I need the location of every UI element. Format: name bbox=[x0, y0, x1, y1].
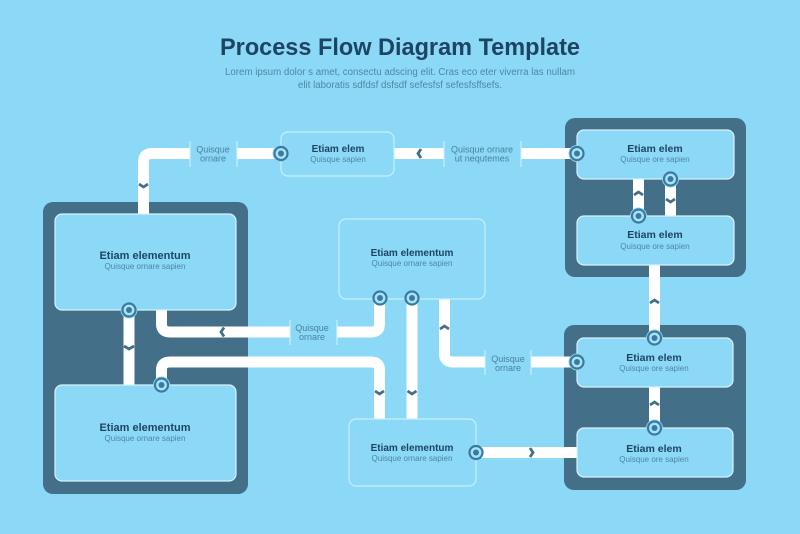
box: top right lower: Quisque ore sapien bbox=[620, 242, 690, 251]
box: center: Quisque ornare sapien bbox=[372, 259, 452, 268]
box: top right lower bbox=[577, 216, 734, 265]
label: quisque ornare top left bbox=[190, 141, 237, 167]
box: left bottom: Quisque ornare sapien bbox=[105, 434, 185, 443]
label: quisque ornare center right: Quisque bbox=[491, 354, 525, 364]
box: top center: Etiam elem bbox=[312, 144, 365, 155]
panel: top right group bbox=[565, 118, 746, 277]
box: bottom center: Etiam elementum bbox=[371, 443, 454, 454]
subtitle bbox=[225, 67, 575, 91]
subtitle: Lorem ipsum dolor s amet, consectu adscing elit. Cras eco eter viverra las nullam bbox=[225, 67, 575, 78]
box: left top: Quisque ornare sapien bbox=[105, 262, 185, 271]
box: center: Etiam elementum bbox=[371, 248, 454, 259]
box: bottom right lower bbox=[577, 428, 733, 477]
label: quisque ornare center left: Quisque bbox=[295, 323, 329, 333]
panel: left group bbox=[43, 202, 248, 494]
box: left top: Etiam elementum bbox=[99, 250, 191, 262]
label: quisque ornare center left bbox=[290, 320, 337, 345]
box: left bottom bbox=[55, 385, 236, 481]
label: quisque ornare center right bbox=[485, 350, 531, 375]
box: top right upper: Etiam elem bbox=[627, 143, 683, 155]
box: left top bbox=[55, 214, 236, 310]
box: top center bbox=[281, 132, 394, 176]
box: top right upper: Quisque ore sapien bbox=[620, 155, 690, 164]
label: quisque ornare center left: ornare bbox=[299, 332, 325, 342]
label: quisque ornare ut nequtemes bbox=[444, 141, 521, 167]
label: quisque ornare top left: ornare bbox=[200, 154, 226, 164]
panel: bottom right group bbox=[564, 325, 746, 490]
box: center bbox=[339, 219, 485, 299]
box: bottom right upper bbox=[577, 338, 733, 387]
box: bottom right upper: Etiam elem bbox=[626, 352, 682, 364]
connector nodes bbox=[120, 145, 679, 459]
box: bottom right lower: Etiam elem bbox=[626, 443, 682, 455]
connector pipes bbox=[129, 154, 670, 452]
box: left bottom: Etiam elementum bbox=[99, 422, 191, 434]
subtitle: elit laboratis sdfdsf dsfsdf sefesfsf sefesfsffsefs. bbox=[298, 80, 502, 91]
label: quisque ornare ut nequtemes: ut nequtemes bbox=[455, 154, 510, 164]
box: bottom center: Quisque ornare sapien bbox=[372, 454, 452, 463]
box: bottom center bbox=[349, 419, 476, 486]
box: bottom right lower: Quisque ore sapien bbox=[619, 455, 689, 464]
label: quisque ornare ut nequtemes: Quisque ornare bbox=[451, 144, 513, 154]
box: top right lower: Etiam elem bbox=[627, 229, 683, 241]
box: top right upper bbox=[577, 130, 734, 179]
title: Process Flow Diagram Template bbox=[220, 34, 580, 61]
flow direction chevrons bbox=[124, 149, 675, 457]
box: bottom right upper: Quisque ore sapien bbox=[619, 364, 689, 373]
box: top center: Quisque sapien bbox=[310, 155, 366, 164]
label: quisque ornare top left: Quisque bbox=[196, 144, 230, 154]
label: quisque ornare center right: ornare bbox=[495, 363, 521, 373]
